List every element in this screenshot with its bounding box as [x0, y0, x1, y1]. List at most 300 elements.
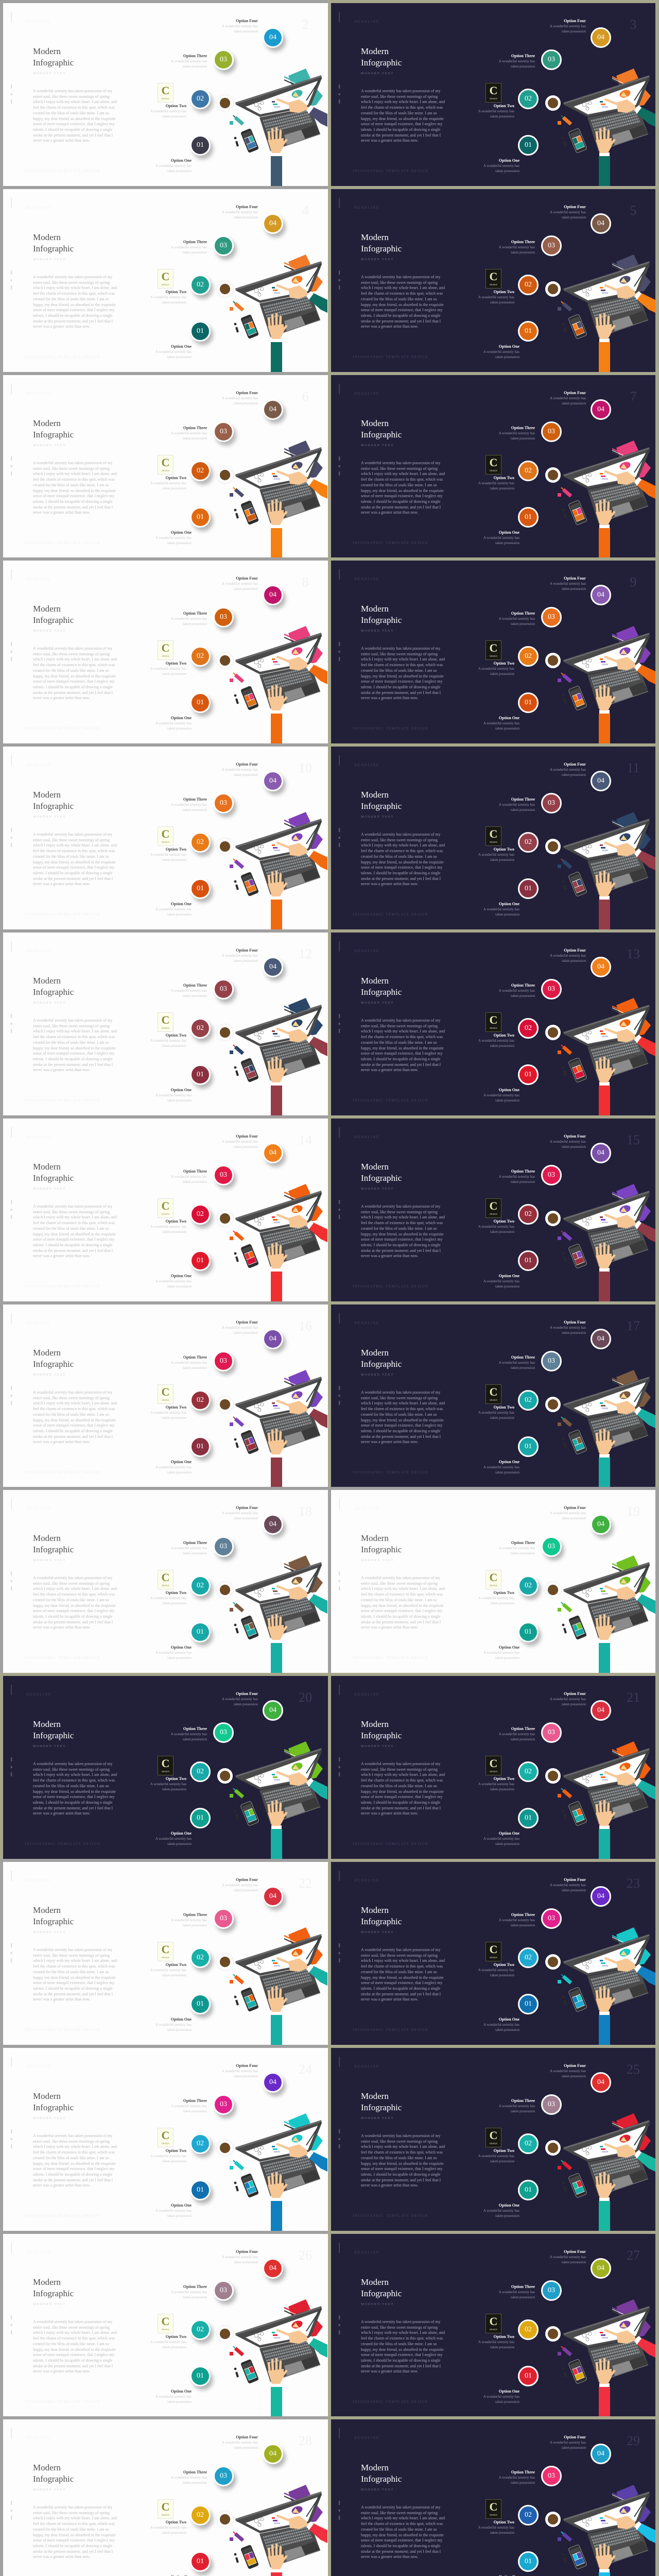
logo	[158, 1942, 174, 1961]
badge 01	[518, 878, 539, 899]
option two: A wonderful serenity has	[150, 1225, 186, 1229]
option one: taken possession	[167, 912, 192, 917]
option two: Option Two	[166, 847, 186, 852]
body text: feel the charm of existence in this spot, which was	[33, 2336, 115, 2341]
illustration: laptop workspace	[331, 1862, 655, 2045]
option two	[458, 1219, 514, 1234]
body text: never was a greater artist than now.	[33, 882, 90, 886]
body text: feel the charm of existence in this spot, which was	[361, 2521, 443, 2526]
badge 03	[541, 979, 562, 999]
option three: taken possession	[511, 2295, 535, 2299]
option three: taken possession	[511, 1923, 535, 1927]
body text: talents. I should be incapable of drawing a single	[361, 1429, 440, 1433]
badge 02	[518, 1018, 539, 1039]
icon: coffee cup	[545, 1025, 561, 1040]
footer: INFOGRAPHIC TEMPLATE DESIGN	[353, 1842, 428, 1846]
page number: 8	[302, 574, 309, 589]
badge 04: 04	[269, 963, 276, 971]
badge 04: 04	[269, 1149, 276, 1157]
subtitle: MODERN TEXT	[33, 2488, 66, 2492]
body text: talents. I should be incapable of drawing a single	[33, 1243, 112, 1247]
badge 02: 02	[197, 95, 204, 103]
badge 01: 01	[525, 141, 532, 149]
body text: which I enjoy with my whole heart. I am alone, and	[33, 1215, 117, 1219]
body text: A wonderful serenity has taken possession of my	[33, 1761, 112, 1766]
icon: coffee cup	[545, 467, 561, 483]
option one	[135, 716, 192, 731]
badge 01	[518, 1436, 539, 1457]
body text: A wonderful serenity has taken possession of my	[33, 1947, 112, 1952]
badge 04	[591, 399, 611, 420]
icon: coffee cup	[545, 95, 561, 111]
body text: A wonderful serenity has taken possession of my	[361, 2505, 441, 2510]
option four: taken possession	[234, 1888, 258, 1892]
option three	[150, 983, 207, 998]
option four: Option Four	[564, 1877, 586, 1882]
option four: Option Four	[236, 1877, 258, 1882]
subtitle: MODERN TEXT	[33, 2116, 66, 2120]
badge 03: 03	[548, 2472, 555, 2480]
option two	[130, 1033, 186, 1048]
body text	[361, 1390, 445, 1445]
body text: talents. I should be incapable of drawing a single	[361, 1614, 440, 1619]
body text: which I enjoy with my whole heart. I am alone, and	[361, 99, 445, 104]
option four: A wonderful serenity has	[550, 396, 586, 400]
badge 02: 02	[525, 281, 532, 289]
option three	[478, 2470, 535, 2485]
body text: which I enjoy with my whole heart. I am alone, and	[33, 2144, 117, 2149]
badge 03: 03	[220, 2472, 227, 2480]
option four: A wonderful serenity has	[222, 1511, 258, 1515]
option four: Option Four	[236, 1505, 258, 1510]
illustration: laptop workspace	[331, 1304, 655, 1487]
logo: DESIGN	[162, 469, 169, 472]
body text: talents. I should be incapable of drawing a single	[33, 127, 112, 132]
title: Infographic	[361, 1545, 402, 1554]
option one: taken possession	[495, 912, 519, 917]
body text: stroke at the present moment; and yet I feel that I	[33, 1062, 113, 1067]
badge 01: 01	[197, 1071, 204, 1078]
option three: Option Three	[511, 1540, 535, 1545]
illustration: laptop workspace	[331, 747, 655, 929]
badge 01	[190, 1808, 211, 1828]
body text: which I enjoy with my whole heart. I am alone, and	[361, 2144, 445, 2149]
header: HEADLINE	[26, 1321, 51, 1325]
badge 02: 02	[525, 1582, 532, 1589]
option three: Option Three	[511, 240, 535, 244]
option four: taken possession	[234, 2074, 258, 2078]
logo: DESIGN	[490, 1770, 497, 1773]
option three: A wonderful serenity has	[499, 431, 535, 435]
logo	[158, 1384, 174, 1404]
body text: stroke at the present moment; and yet I feel that I	[33, 1620, 113, 1624]
option one: A wonderful serenity has	[483, 1465, 519, 1469]
subtitle: MODERN TEXT	[361, 1373, 394, 1377]
body text: happy, my dear friend, so absorbed in the exquisite	[33, 1046, 116, 1050]
logo: DESIGN	[490, 2514, 497, 2516]
illustration: laptop workspace	[339, 198, 655, 372]
option two: A wonderful serenity has	[150, 1411, 186, 1415]
option one: Option One	[171, 2203, 192, 2208]
option three	[478, 1912, 535, 1928]
body text: created for the bliss of souls like mine. I am so	[33, 854, 109, 859]
option two: Option Two	[166, 661, 186, 666]
body text: sense of mere tranquil existence, that I neglect my	[33, 2538, 114, 2543]
option four: Option Four	[236, 762, 258, 767]
option three: Option Three	[511, 1169, 535, 1174]
option one: A wonderful serenity has	[483, 164, 519, 168]
option two: Option Two	[494, 290, 514, 294]
option two: Option Two	[494, 104, 514, 108]
logo	[158, 1756, 174, 1775]
option three	[150, 1355, 207, 1370]
body text: entire soul, like these sweet mornings of spring	[361, 1767, 438, 1772]
option two: Option Two	[166, 1219, 186, 1224]
badge 02	[518, 2133, 539, 2154]
body text: sense of mere tranquil existence, that I neglect my	[33, 122, 114, 126]
option one: taken possession	[167, 1656, 192, 1660]
badge 04: 04	[597, 591, 604, 599]
badge 03	[213, 2466, 234, 2486]
option one	[135, 1274, 192, 1289]
option two	[478, 104, 514, 118]
badge 02: 02	[525, 652, 532, 660]
option one: taken possession	[495, 2400, 519, 2404]
badge 02	[190, 832, 211, 853]
icon: coffee cup	[217, 1582, 233, 1598]
badge 02	[190, 2133, 211, 2154]
option two	[458, 1405, 514, 1420]
body text: sense of mere tranquil existence, that I neglect my	[361, 865, 442, 870]
option three: A wonderful serenity has	[171, 1361, 207, 1365]
body text	[361, 832, 445, 887]
illustration: laptop workspace	[331, 1490, 655, 1673]
title: Modern	[361, 1162, 389, 1172]
body text: stroke at the present moment; and yet I feel that I	[33, 690, 113, 695]
logo: C	[162, 84, 169, 97]
body text: sense of mere tranquil existence, that I neglect my	[361, 1980, 442, 1985]
option four: A wonderful serenity has	[550, 24, 586, 28]
title	[33, 975, 74, 998]
option three: taken possession	[183, 1737, 207, 1741]
body text: stroke at the present moment; and yet I feel that I	[361, 876, 441, 881]
panel: slide 4	[3, 189, 328, 372]
badge 04: 04	[269, 33, 276, 41]
option four: Option Four	[236, 2063, 258, 2068]
page number: 26	[299, 2248, 312, 2263]
option four: A wonderful serenity has	[222, 582, 258, 586]
footer: INFOGRAPHIC TEMPLATE DESIGN	[353, 1098, 428, 1103]
option one: taken possession	[167, 169, 192, 173]
subtitle: MODERN TEXT	[33, 1187, 66, 1191]
body text	[361, 461, 445, 515]
body text: never was a greater artist than now.	[361, 1253, 418, 1258]
badge 04	[591, 2072, 611, 2093]
option three: taken possession	[511, 808, 535, 812]
option two: taken possession	[162, 1787, 186, 1791]
option two: A wonderful serenity has	[150, 853, 186, 857]
option four: A wonderful serenity has	[550, 582, 586, 586]
icon: coffee cup	[217, 839, 233, 854]
body text: created for the bliss of souls like mine. I am so	[33, 111, 109, 115]
option two: A wonderful serenity has	[478, 481, 514, 485]
title	[33, 603, 74, 626]
option two: taken possession	[490, 486, 514, 490]
option one: A wonderful serenity has	[155, 907, 192, 911]
logo	[485, 2499, 501, 2519]
option two: Option Two	[166, 290, 186, 294]
option two	[130, 1405, 186, 1420]
page number: 23	[627, 1876, 640, 1891]
logo	[485, 1756, 501, 1775]
body text: entire soul, like these sweet mornings of spring	[361, 280, 438, 285]
panel: slide 18	[3, 1490, 328, 1673]
logo: C	[490, 1757, 497, 1770]
badge 04: 04	[269, 777, 276, 785]
option two: taken possession	[162, 1416, 186, 1420]
footer: INFOGRAPHIC TEMPLATE DESIGN	[353, 1284, 428, 1289]
option three: taken possession	[183, 2295, 207, 2299]
option three	[171, 426, 207, 440]
option three: A wonderful serenity has	[171, 245, 207, 249]
body text	[361, 2319, 445, 2375]
badge 01	[190, 135, 211, 156]
title	[361, 46, 402, 67]
header: HEADLINE	[26, 20, 51, 24]
option three: A wonderful serenity has	[171, 2290, 207, 2294]
page number: 24	[299, 2062, 312, 2077]
option two: Option Two	[166, 2334, 186, 2339]
body text: sense of mere tranquil existence, that I neglect my	[33, 2352, 114, 2357]
option one: A wonderful serenity has	[483, 907, 519, 911]
option two: A wonderful serenity has	[478, 1782, 514, 1786]
body text: happy, my dear friend, so absorbed in the exquisite	[361, 1232, 444, 1236]
option three	[499, 54, 535, 69]
option three: Option Three	[183, 1355, 207, 1360]
option two: A wonderful serenity has	[150, 1968, 186, 1972]
title	[33, 1533, 74, 1555]
option two: Option Two	[494, 847, 514, 852]
footer: INFOGRAPHIC TEMPLATE DESIGN	[25, 169, 100, 173]
option four: taken possession	[234, 2446, 258, 2450]
option two: Option Two	[494, 1405, 514, 1410]
title	[33, 1161, 74, 1184]
body text: feel the charm of existence in this spot, which was	[33, 291, 115, 296]
panel: slide 14	[3, 1118, 328, 1301]
badge 02	[518, 1575, 539, 1596]
page number: 12	[299, 946, 312, 961]
title: Modern	[33, 2277, 61, 2287]
body text: never was a greater artist than now.	[361, 138, 418, 143]
option one: taken possession	[167, 1842, 192, 1846]
footer: INFOGRAPHIC TEMPLATE DESIGN	[25, 1842, 100, 1846]
body text: sense of mere tranquil existence, that I neglect my	[33, 1980, 114, 1985]
body text: talents. I should be incapable of drawing a single	[361, 313, 440, 318]
badge 02: 02	[197, 652, 204, 660]
body text: never was a greater artist than now.	[361, 1439, 418, 1444]
body text: entire soul, like these sweet mornings of spring	[33, 1767, 110, 1772]
option two: Option Two	[166, 476, 186, 480]
body text: happy, my dear friend, so absorbed in the exquisite	[361, 1975, 444, 1980]
icon: coffee cup	[217, 2140, 233, 2156]
option two: Option Two	[166, 1590, 186, 1595]
title: Infographic	[361, 1359, 402, 1369]
logo: C	[162, 1013, 169, 1026]
option one	[463, 902, 519, 917]
title: Modern	[33, 418, 61, 428]
option four: Option Four	[564, 1505, 586, 1510]
option one: Option One	[499, 344, 519, 349]
badge 04	[263, 399, 283, 420]
option four: A wonderful serenity has	[222, 1883, 258, 1887]
illustration: laptop workspace	[3, 933, 327, 1115]
option four: taken possession	[234, 1702, 258, 1706]
badge 03: 03	[220, 1914, 227, 1922]
badge 01: 01	[525, 2000, 532, 2008]
badge 03: 03	[220, 613, 227, 621]
badge 01	[518, 135, 539, 156]
page number: 6	[302, 389, 309, 404]
logo: C	[162, 270, 169, 283]
body text: created for the bliss of souls like mine. I am so	[33, 297, 109, 301]
option four: taken possession	[562, 401, 586, 405]
body text: A wonderful serenity has taken possession of my	[33, 2319, 112, 2324]
logo: DESIGN	[490, 1956, 497, 1959]
body text: never was a greater artist than now.	[33, 2554, 90, 2559]
logo	[158, 2128, 174, 2147]
option two	[130, 2520, 186, 2535]
badge 03: 03	[548, 1914, 555, 1922]
option four	[529, 2249, 586, 2265]
title: Infographic	[33, 2474, 74, 2484]
body text	[33, 275, 117, 329]
badge 02	[190, 1204, 211, 1225]
logo: DESIGN	[162, 2142, 169, 2145]
option four: Option Four	[564, 1320, 586, 1325]
badge 01: 01	[197, 2372, 204, 2380]
logo: DESIGN	[490, 2328, 497, 2331]
body text: sense of mere tranquil existence, that I neglect my	[361, 1237, 442, 1242]
badge 03: 03	[220, 428, 227, 435]
badge 04: 04	[269, 1520, 276, 1528]
body text: talents. I should be incapable of drawing a single	[361, 1800, 440, 1805]
body text: created for the bliss of souls like mine. I am so	[33, 2156, 109, 2160]
logo: DESIGN	[490, 655, 497, 657]
body text: never was a greater artist than now.	[361, 1625, 418, 1630]
option three: taken possession	[183, 1180, 207, 1184]
icon: coffee cup	[217, 653, 233, 668]
option one: Option One	[499, 530, 519, 535]
option four: taken possession	[562, 2446, 586, 2450]
badge 04	[263, 1886, 283, 1907]
body text: created for the bliss of souls like mine. I am so	[361, 854, 437, 859]
option two	[458, 1962, 514, 1978]
option three: taken possession	[183, 622, 207, 626]
badge 04: 04	[269, 1335, 276, 1343]
option three	[478, 983, 535, 998]
body text: entire soul, like these sweet mornings of spring	[361, 1024, 438, 1028]
title: Infographic	[361, 987, 402, 997]
option four: A wonderful serenity has	[550, 1326, 586, 1330]
body text: sense of mere tranquil existence, that I neglect my	[33, 1237, 114, 1242]
logo	[485, 826, 501, 846]
option two: taken possession	[490, 2531, 514, 2535]
option three: taken possession	[511, 1366, 535, 1370]
header: HEADLINE	[354, 577, 379, 581]
option two: A wonderful serenity has	[150, 109, 186, 113]
body text: never was a greater artist than now.	[361, 1997, 418, 2002]
page number: 29	[627, 2433, 640, 2448]
body text: sense of mere tranquil existence, that I neglect my	[361, 308, 442, 312]
badge 04	[263, 585, 283, 605]
body text: A wonderful serenity has taken possession of my	[33, 832, 112, 837]
panel: slide 12	[3, 933, 328, 1115]
icon: coffee cup	[217, 2326, 233, 2342]
body text: A wonderful serenity has taken possession of my	[361, 1204, 441, 1209]
badge 03: 03	[548, 2100, 555, 2108]
body text: never was a greater artist than now.	[361, 2369, 418, 2374]
option one: taken possession	[495, 541, 519, 545]
body text: entire soul, like these sweet mornings of spring	[361, 2325, 438, 2330]
option two	[458, 1776, 514, 1792]
option two	[458, 1033, 514, 1048]
badge 01: 01	[197, 1814, 204, 1822]
option one	[463, 1274, 519, 1289]
badge 03	[213, 1351, 234, 1371]
title: Modern	[361, 976, 389, 986]
panel: slide 25	[331, 2048, 655, 2231]
header: HEADLINE	[354, 2064, 379, 2069]
badge 02	[518, 2319, 539, 2340]
badge 03	[541, 235, 562, 256]
option one: Option One	[171, 716, 192, 720]
badge 01: 01	[197, 699, 204, 706]
subtitle: MODERN TEXT	[361, 1558, 394, 1562]
body text	[361, 1204, 445, 1259]
option two: Option Two	[494, 2148, 514, 2153]
option four	[201, 576, 258, 591]
logo: C	[490, 270, 497, 283]
panel: slide 16	[3, 1304, 328, 1487]
subtitle: MODERN TEXT	[361, 72, 394, 75]
panel: slide 2	[3, 3, 328, 186]
option two: taken possession	[162, 1044, 186, 1048]
subtitle: MODERN TEXT	[33, 258, 66, 261]
panel: slide 10	[3, 747, 328, 929]
badge 02: 02	[525, 2511, 532, 2519]
illustration: laptop workspace	[331, 2419, 655, 2576]
body text: stroke at the present moment; and yet I feel that I	[361, 1620, 441, 1624]
body text: created for the bliss of souls like mine. I am so	[361, 2527, 437, 2532]
title: Modern	[361, 1348, 389, 1358]
title: Infographic	[361, 58, 402, 67]
badge 04	[591, 2258, 611, 2279]
body text: talents. I should be incapable of drawing a single	[361, 2544, 440, 2548]
body text: A wonderful serenity has taken possession of my	[33, 646, 112, 651]
logo: C	[490, 2315, 497, 2328]
body text: feel the charm of existence in this spot, which was	[33, 2521, 115, 2526]
option two: taken possession	[162, 2531, 186, 2535]
icon: coffee cup	[217, 1397, 233, 1412]
footer: INFOGRAPHIC TEMPLATE DESIGN	[25, 541, 100, 545]
badge 04	[263, 213, 283, 234]
option three: Option Three	[183, 983, 207, 988]
body text: which I enjoy with my whole heart. I am alone, and	[33, 471, 117, 476]
body text	[33, 89, 117, 143]
title: Modern	[361, 418, 389, 428]
badge 03: 03	[548, 985, 555, 993]
option two: taken possession	[162, 2345, 186, 2349]
